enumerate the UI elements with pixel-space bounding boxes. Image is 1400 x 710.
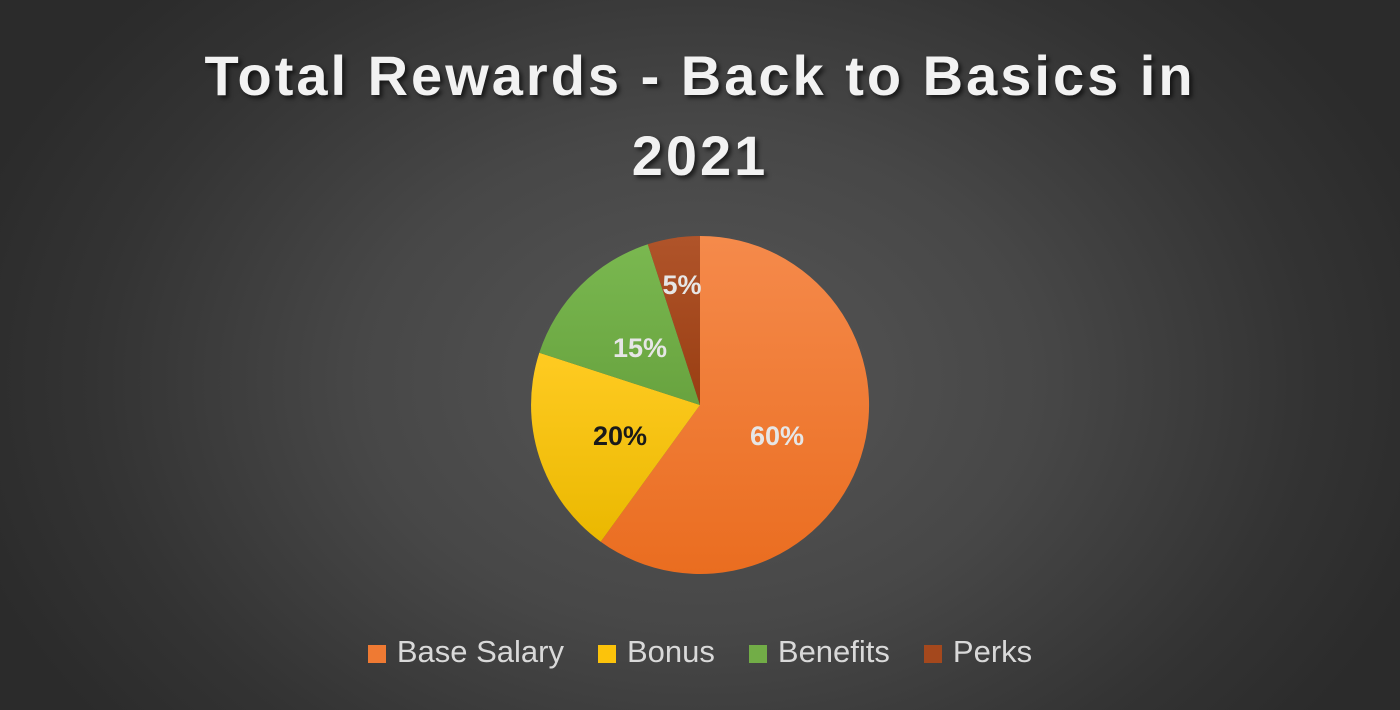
slice: perks 5% xyxy=(648,236,700,405)
legend: Perks xyxy=(953,634,1032,669)
slice: base salary 60% xyxy=(601,236,869,574)
legend: Bonus xyxy=(627,634,715,669)
label 5%: 5% xyxy=(662,270,702,300)
title: 2021 xyxy=(632,124,768,187)
label 60%: 60% xyxy=(750,421,804,451)
legend xyxy=(368,634,1032,669)
legend: Base Salary xyxy=(397,634,564,669)
title xyxy=(204,44,1196,187)
title: Total Rewards - Back to Basics in xyxy=(204,44,1196,107)
label 20%: 20% xyxy=(593,421,647,451)
slice: benefits 15% xyxy=(539,244,700,405)
legend: Benefits xyxy=(778,634,890,669)
label 15%: 15% xyxy=(613,333,667,363)
slice: bonus 20% xyxy=(531,353,700,542)
